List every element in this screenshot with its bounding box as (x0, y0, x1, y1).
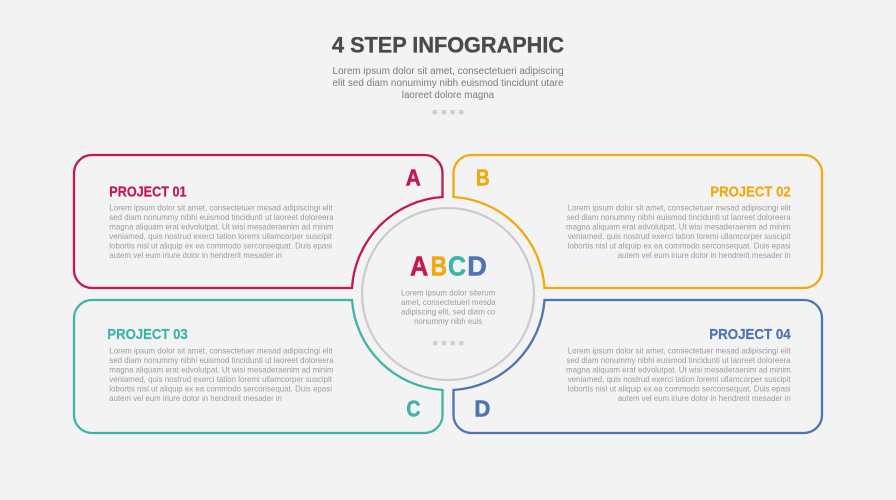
body text project 03 (109, 345, 334, 403)
panel outline B (454, 155, 822, 288)
body text project 04: lobortis nisl ut aliquip ex ea commodo serconsequat. Duis epasi (568, 383, 791, 393)
center circle (362, 208, 534, 380)
body text project 03: veniamed, quis nostrud exerci tation loremi ullamcorper suscipit (109, 374, 333, 384)
center text: amet, consectetueri mesda (401, 297, 496, 307)
heading project 04: PROJECT 04 (709, 326, 791, 343)
body text project 01: veniamed, quis nostrud exerci tation loremi ullamcorper suscipit (109, 231, 333, 241)
body text project 02: lobortis nisl ut aliquip ex ea commodo serconsequat. Duis epasi (568, 240, 791, 250)
ABCD wordmark: B (431, 251, 447, 282)
body text project 01: lobortis nisl ut aliquip ex ea commodo serconsequat. Duis epasi (109, 240, 332, 250)
body text project 04 (566, 345, 791, 403)
body text project 02: Lorem ipsum dolor sit amet, consectetuer mesad adipiscingi elit (568, 202, 791, 212)
ABCD wordmark (410, 251, 487, 282)
body text project 04: magna aliquam erat edvolutpat. Ut wisi mesaderaenim ad minim (566, 364, 791, 374)
panel: project 03 (74, 300, 442, 433)
center text (401, 288, 496, 326)
title: 4 STEP INFOGRAPHIC (332, 32, 564, 57)
body text project 03: Lorem ipsum dolor sit amet, consectetuer mesad adipiscingi elit (109, 345, 333, 355)
body text project 01 (109, 202, 334, 260)
circle ring (362, 208, 534, 380)
panel: project 02 (454, 155, 822, 288)
body text project 04: Lorem ipsum dolor sit amet, consectetuer mesad adipiscingi elit (568, 345, 791, 355)
heading project 01: PROJECT 01 (109, 184, 186, 200)
center text: Lorem ipsum dolor siterum (401, 288, 495, 298)
body text project 04: veniamed, quis nostrud exerci tation loremi ullamcorper suscipit (568, 374, 791, 384)
body text project 01: magna aliquam erat edvolutpat. Ut wisi mesaderaenim ad minim (109, 222, 334, 232)
letter A: A (406, 165, 421, 191)
body text project 04: autem vel eum iriure dolor in hendrerit mesader in (618, 393, 791, 403)
body text project 02: magna aliquam erat edvolutpat. Ut wisi mesaderaenim ad minim (566, 222, 791, 232)
body text project 03: lobortis nisl ut aliquip ex ea commodo serconsequat. Duis epasi (109, 383, 332, 393)
panel: project 01 (74, 155, 442, 288)
body text project 01: autem vel eum iriure dolor in hendrerit mesader in (109, 250, 282, 260)
letter D: D (474, 396, 490, 422)
center text: nonummy nibh euis (414, 316, 482, 326)
body text project 02: autem vel eum iriure dolor in hendrerit mesader in (618, 250, 791, 260)
center dots (433, 341, 464, 345)
panel outline C (74, 300, 442, 433)
panel outline A (74, 155, 442, 288)
body text project 02: veniamed, quis nostrud exerci tation loremi ullamcorper suscipit (568, 231, 791, 241)
panel: project 04 (454, 300, 822, 433)
subtitle: laoreet dolore magna (402, 90, 495, 101)
subtitle: elit sed diam nonumimy nibh euismod tincidunt utare (332, 78, 564, 89)
heading project 02: PROJECT 02 (710, 184, 791, 200)
body text project 02: sed diam nonummy nibhi euismod tincidunti ut laoreet doloreera (566, 212, 791, 222)
header dots (433, 110, 463, 114)
ABCD wordmark: A (410, 251, 428, 282)
heading project 03: PROJECT 03 (107, 326, 188, 343)
body text project 02 (566, 202, 791, 260)
panel outline D (454, 300, 822, 433)
body text project 03: sed diam nonummy nibhi euismod tincidunti ut laoreet doloreera (109, 355, 334, 365)
letter B: B (476, 165, 490, 191)
body text project 01: Lorem ipsum dolor sit amet, consectetuer mesad adipiscingi elit (109, 202, 333, 212)
ABCD wordmark: C (448, 251, 466, 282)
body text project 03: magna aliquam erat edvolutpat. Ut wisi mesaderaenim ad minim (109, 364, 334, 374)
body text project 01: sed diam nonummy nibhi euismod tincidunti ut laoreet doloreera (109, 212, 334, 222)
body text project 04: sed diam nonummy nibhi euismod tincidunti ut laoreet doloreera (566, 355, 791, 365)
letter C: C (406, 396, 420, 422)
center text: adipiscing elit, sed diam co (401, 306, 496, 316)
subtitle: Lorem ipsum dolor sit amet, consectetueri adipiscing (332, 66, 564, 77)
header block (332, 32, 564, 114)
body text project 03: autem vel eum iriure dolor in hendrerit mesader in (109, 393, 282, 403)
subtitle (332, 66, 564, 101)
ABCD wordmark: D (467, 251, 487, 282)
